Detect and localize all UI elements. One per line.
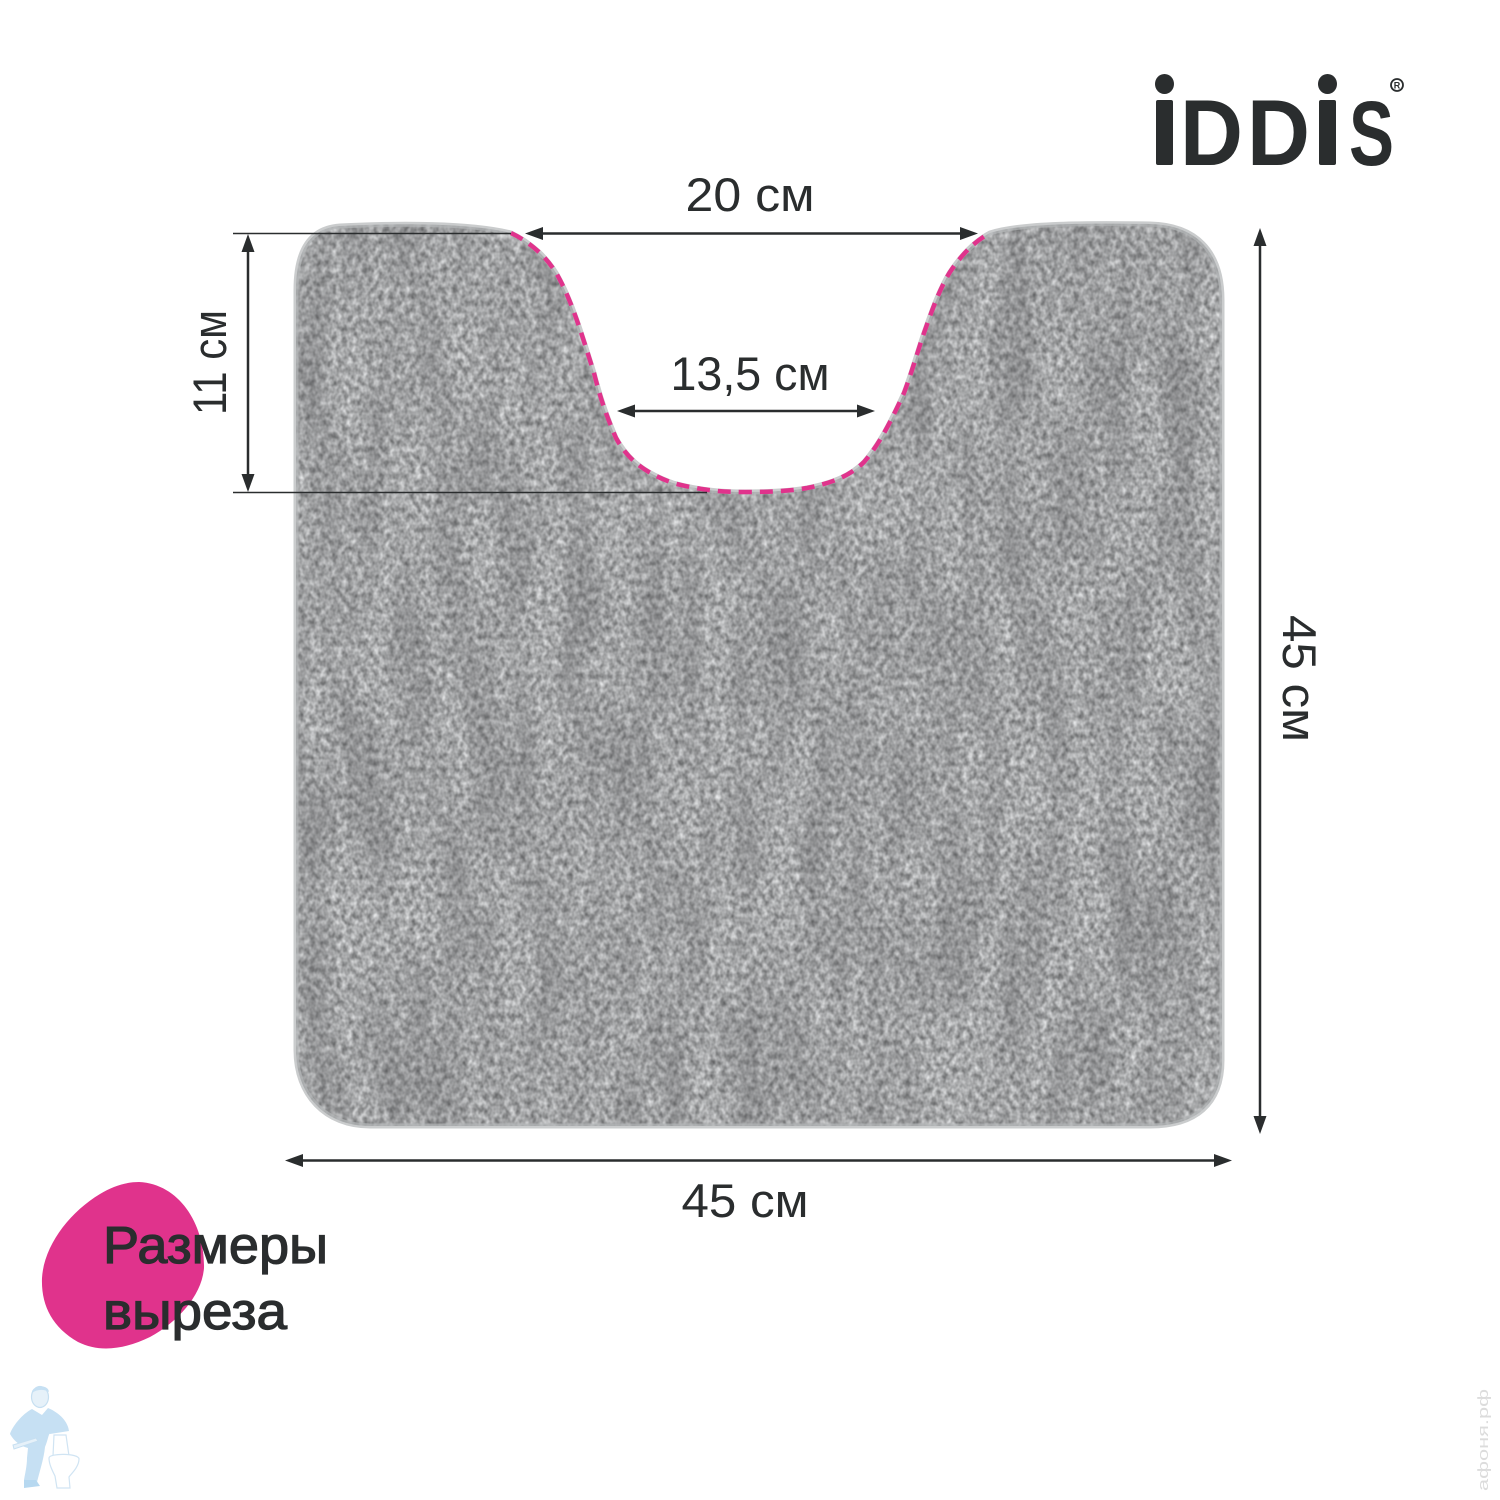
dimension: cut-out top width 20 cm	[525, 168, 978, 240]
dimension: cut-out depth 11 cm	[183, 234, 707, 492]
dimension: cut-out inner width 13,5 cm: 13,5 см	[670, 347, 830, 400]
logo: IDDIS: R	[1394, 80, 1401, 90]
heading: cut-out sizes	[103, 1217, 328, 1341]
dimension: cut-out depth 11 cm: 11 см	[183, 310, 236, 415]
logo: IDDIS	[1155, 74, 1403, 185]
logo: IDDIS: S	[1349, 83, 1394, 185]
pink dashed cut-out outline	[511, 233, 990, 492]
dimension: mat width 45 cm	[285, 1154, 1232, 1227]
pink blob	[42, 1182, 204, 1348]
logo: IDDIS: D	[1247, 80, 1310, 185]
watermark: site name: афоня.рф	[1475, 1389, 1492, 1491]
heading: cut-out sizes: выреза	[103, 1283, 287, 1341]
dimension: mat width 45 cm: 45 см	[682, 1174, 808, 1227]
dimension: cut-out top width 20 cm: 20 см	[686, 168, 814, 221]
logo: IDDIS: D	[1180, 80, 1243, 185]
heading: cut-out sizes: Размеры	[103, 1217, 328, 1275]
icon: plumber leaning on toilet	[10, 1386, 79, 1488]
dimension: mat height 45 cm	[1254, 228, 1326, 1134]
dimension: cut-out inner width 13,5 cm	[617, 347, 875, 418]
bath mat with toilet cut-out	[296, 224, 1222, 1126]
dimension: mat height 45 cm: 45 см	[1273, 615, 1326, 742]
